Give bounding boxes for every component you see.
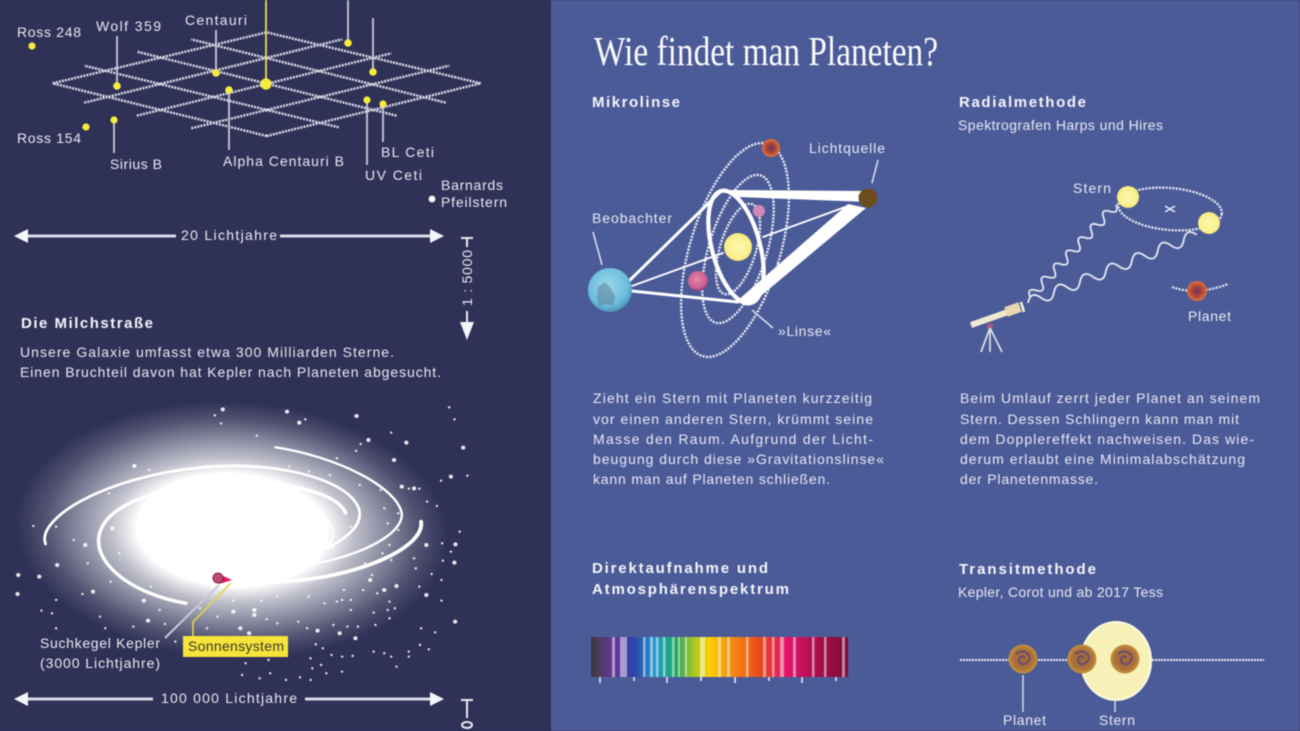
icon: star position 1: [1117, 186, 1139, 208]
icon: planet: [1172, 281, 1228, 301]
panel: right background: [551, 0, 1300, 731]
heading: Direktaufnahme und Atmosphärenspektrum: Direktaufnahme und: [592, 560, 768, 577]
text block: Mikrolinse: Masse den Raum. Aufgrund der Licht-: [593, 431, 873, 447]
subheading: Radialmethode: Spektrografen Harps und Hires: [958, 117, 1163, 133]
text block: Mikrolinse: kann man auf Planeten schließen.: [593, 471, 830, 487]
text block: Mikrolinse: vor einen anderen Stern, krümmt seine: [593, 411, 873, 427]
star labels: Wolf 359: [96, 18, 161, 34]
solar system leader: [193, 583, 231, 637]
chart: Milky Way galaxy: [10, 391, 467, 680]
star labels: Ross 154: [17, 130, 81, 146]
label: Lichtquelle: [809, 140, 885, 183]
arrow: 100 000 Lichtjahre: 100 000 Lichtjahre: [161, 690, 297, 706]
label: Stern: Stern: [1073, 180, 1111, 196]
diagram: transit: [960, 622, 1264, 728]
label: Suchkegel Kepler: (3000 Lichtjahre): [40, 655, 160, 671]
title: Wie findet man Planeten?: [594, 28, 938, 74]
label: Linse: »Linse«: [778, 323, 831, 339]
star labels: Sirius B: [110, 156, 162, 172]
text block: Radialmethode: [960, 390, 1260, 487]
chart: spectrum: [591, 637, 848, 683]
arrow: 20 Lichtjahre: 20 Lichtjahre: [181, 227, 277, 243]
star dots: [28, 39, 435, 202]
dotted orbits: [660, 131, 810, 369]
label: Suchkegel Kepler: [40, 635, 160, 671]
label: Planet: Planet: [1188, 308, 1231, 324]
star labels: Pfeilstern: [441, 194, 507, 210]
text block: Radialmethode: Stern. Dessen Schlingern kann man mit: [960, 411, 1239, 427]
text block: Milky Way intro: Einen Bruchteil davon hat Kepler nach Planeten abgesucht.: [20, 364, 441, 380]
heading: Radialmethode: Radialmethode: [959, 94, 1086, 111]
scale: 1 : 5000: [459, 238, 475, 340]
text block: Milky Way intro: [20, 344, 441, 380]
icon: planet 1: [1008, 644, 1038, 674]
text block: Mikrolinse: [593, 390, 884, 487]
icon: planet 3: [1110, 644, 1140, 674]
icon: telescope: [971, 302, 1024, 352]
subheading: Transitmethode: Kepler, Corot und ab 2017 Tess: [958, 584, 1163, 600]
star leader lines: [114, 0, 383, 165]
label: Lichtquelle: Lichtquelle: [809, 140, 885, 156]
label: Beobachter: [592, 210, 672, 265]
sun position marker: [219, 574, 232, 584]
diagram: microlensing: [588, 131, 885, 369]
Kepler search cone line: [165, 585, 219, 638]
star labels: Alpha Centauri B: [223, 153, 344, 169]
barycentre mark: [1165, 206, 1175, 212]
label: Linse: [752, 310, 831, 339]
marker dot: [213, 573, 223, 583]
heading: Direktaufnahme und Atmosphärenspektrum: [592, 560, 789, 598]
label: Planet: Planet: [1003, 712, 1046, 728]
icon: central star: [724, 233, 752, 261]
heading: Transitmethode: Transitmethode: [959, 561, 1096, 578]
light beams: [720, 190, 868, 305]
text block: Radialmethode: Beim Umlauf zerrt jeder Planet an seinem: [960, 390, 1260, 406]
galaxy glow: [10, 391, 454, 669]
heading: Mikrolinse: Mikrolinse: [592, 94, 680, 111]
leader lines: [1023, 675, 1115, 712]
text block: Mikrolinse: Zieht ein Stern mit Planeten kurzzeitig: [593, 390, 872, 406]
orbit: [1116, 184, 1224, 234]
star labels: Barnards: [441, 177, 503, 193]
panel: nearby stars: [17, 0, 507, 210]
spectral lines: [612, 637, 845, 677]
ticks: [600, 677, 836, 683]
text block: Mikrolinse: beugung durch diese »Gravitationslinse«: [593, 451, 884, 467]
wavy light 1: [1027, 202, 1119, 300]
label: Stern: Stern: [1099, 712, 1135, 728]
icon: star position 2: [1198, 212, 1220, 234]
diagram: radial velocity: [971, 180, 1231, 352]
wavy light 2: [1026, 230, 1199, 308]
star labels: UV Ceti: [365, 167, 422, 183]
star labels: Centauri: [185, 12, 247, 28]
arrow: 20 Lichtjahre: [14, 227, 444, 243]
text block: Radialmethode: dem Dopplereffekt nachweisen. Das wie-: [960, 431, 1254, 447]
label: Beobachter: Beobachter: [592, 210, 672, 226]
icon: planet 2: [1068, 644, 1096, 674]
star labels: Ross 248: [17, 24, 81, 40]
icon: Earth observer: [588, 268, 632, 312]
label: Sonnensystem: [183, 636, 288, 657]
text block: Milky Way intro: Unsere Galaxie umfasst etwa 300 Milliarden Sterne.: [20, 344, 394, 360]
field stars: [18, 407, 467, 680]
heading: Direktaufnahme und Atmosphärenspektrum: Atmosphärenspektrum: [592, 581, 789, 598]
spiral arms: [45, 447, 421, 603]
icon: small planet: [753, 205, 765, 217]
label: Sonnensystem: Sonnensystem: [188, 638, 284, 654]
lens ring: [698, 185, 774, 309]
star map grid: [53, 32, 481, 136]
icon: light source: [858, 188, 878, 208]
heading: Die Milchstraße: Die Milchstraße: [21, 315, 153, 332]
icon: pink planet: [688, 271, 708, 291]
text block: Radialmethode: der Planetenmasse.: [960, 471, 1098, 487]
icon: star: [1081, 622, 1151, 700]
icon: orange planet: [762, 139, 780, 157]
orbit line: [960, 659, 1264, 661]
star labels: BL Ceti: [381, 144, 434, 160]
arrow: 100 000 Lichtjahre: [14, 690, 444, 706]
scale: cropped bottom: [461, 700, 473, 728]
panel: left background: [0, 0, 551, 731]
text block: Radialmethode: derum erlaubt eine Minimalabschätzung: [960, 451, 1245, 467]
star labels: [17, 12, 507, 210]
scale: 1 : 5000: 1 : 5000: [459, 250, 475, 306]
label: Suchkegel Kepler: Suchkegel Kepler: [40, 635, 160, 651]
